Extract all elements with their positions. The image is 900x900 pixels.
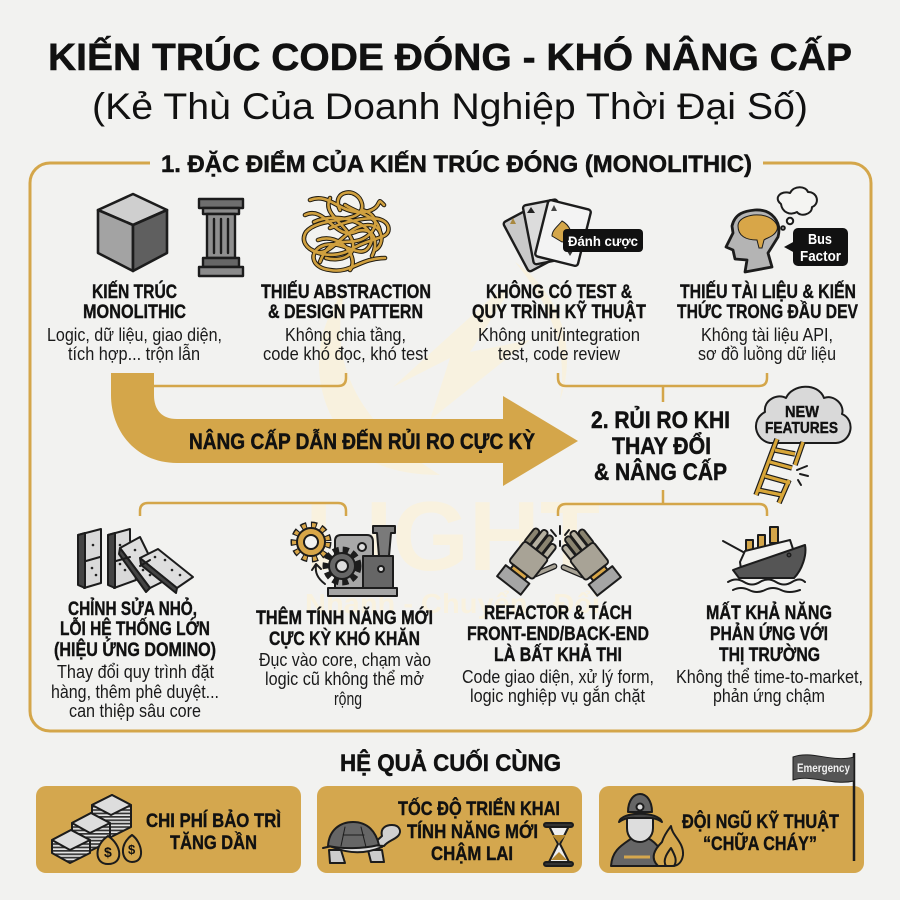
text block: Thiếu tài liệu: THIẾU TÀI LIỆU & KIẾN (680, 279, 856, 303)
watermark: Light logo: LIGHT (305, 481, 600, 591)
panel: main frame (30, 163, 871, 731)
text block: Refactor: FRONT-END/BACK-END (467, 623, 649, 645)
icon: firefighter and flame (611, 794, 683, 866)
panel: slow deployment: TỐC ĐỘ TRIỂN KHAI (398, 796, 560, 820)
icon: money stacks and bags: $ (104, 844, 112, 860)
panel: slow deployment: CHẬM LAI (431, 841, 513, 865)
icon: head with brain, thought cloud and Bus Factor (726, 187, 848, 272)
icon: hourglass (544, 823, 573, 866)
text block: Thiếu abstraction: code khó đọc, khó test (263, 343, 428, 364)
icon: money stacks and bags: $ (128, 842, 136, 857)
title (48, 35, 852, 127)
bracket: top right connector (558, 373, 767, 402)
icon: sinking ship (723, 527, 805, 592)
panel: firefighting team: ĐỘI NGŨ KỸ THUẬT (682, 809, 839, 833)
title: KIẾN TRÚC CODE ĐÓNG - KHÓ NÂNG CẤP (48, 35, 852, 79)
text block: Thiếu tài liệu (677, 279, 858, 364)
heading: section 2: & NÂNG CẤP (594, 458, 727, 486)
text block: Chỉnh sửa nhỏ: Thay đổi quy trình đặt (57, 661, 214, 682)
text block: Mất khả năng: phản ứng chậm (713, 685, 825, 706)
text block: Thiếu abstraction: THIẾU ABSTRACTION (261, 280, 431, 303)
text block: Thiếu tài liệu: sơ đồ luồng dữ liệu (698, 343, 836, 364)
text block: Refactor: LÀ BẤT KHẢ THI (494, 643, 622, 666)
text block: Thêm tính năng mới: rộng (334, 688, 362, 709)
heading: section 2: THAY ĐỔI (612, 432, 711, 460)
icon: playing cards with Đánh cược label (503, 199, 643, 272)
heading: section 2 (591, 405, 730, 486)
icon: column (199, 199, 243, 276)
text block: Không có test: Không unit/integration (478, 324, 640, 345)
text block: Kiến trúc Monolithic: tích hợp... trộn lẫn (68, 343, 200, 364)
heading: section 2: 2. RỦI RO KHI (591, 405, 730, 434)
text block: Chỉnh sửa nhỏ: can thiệp sâu core (69, 700, 201, 721)
text block: Kiến trúc Monolithic: MONOLITHIC (83, 301, 186, 323)
icon: new features cloud and broken ladder (756, 387, 851, 503)
watermark: Light logo (305, 262, 600, 619)
text block: Không có test: KHÔNG CÓ TEST & (486, 279, 632, 303)
arrow: upgrade leads to risk (111, 373, 578, 486)
bracket: lower right connector (558, 490, 767, 516)
icon: falling dominoes (78, 529, 193, 593)
icon: monolith cube (98, 194, 167, 271)
text block: Mất khả năng: THỊ TRƯỜNG (719, 642, 820, 666)
icon: robot hands separating (497, 524, 621, 601)
text block: Thêm tính năng mới: THÊM TÍNH NĂNG MỚI (256, 605, 433, 629)
text block: Thêm tính năng mới: CỰC KỲ KHÓ KHĂN (269, 626, 420, 650)
text block: Mất khả năng: MẤT KHẢ NĂNG (706, 601, 832, 624)
icon: tangled spaghetti (304, 193, 389, 271)
text block: Thiếu abstraction (261, 280, 431, 364)
text block: Refactor (462, 601, 654, 706)
text block: Kiến trúc Monolithic: KIẾN TRÚC (92, 279, 177, 303)
text block: Thiếu abstraction: Không chia tầng, (285, 324, 406, 345)
icon: money stacks and bags (52, 795, 141, 864)
text block: Chỉnh sửa nhỏ (51, 596, 219, 721)
text block: Refactor: REFACTOR & TÁCH (484, 601, 632, 624)
icon: new features cloud and broken ladder: NEW (785, 404, 820, 421)
icon: emergency flag (793, 753, 854, 861)
panel: firefighting team (599, 786, 864, 873)
icon: emergency flag: Emergency (797, 763, 851, 775)
text block: Không có test: test, code review (498, 343, 621, 364)
panel: maintenance cost: TĂNG DẦN (170, 831, 257, 854)
icon: head with brain, thought cloud and Bus Factor: Bus (808, 231, 832, 248)
text block: Thêm tính năng mới (256, 605, 433, 709)
text block: Mất khả năng: PHẢN ỨNG VỚI (710, 621, 828, 645)
panel: slow deployment (317, 786, 582, 873)
heading: section 1: 1. ĐẶC ĐIỂM CỦA KIẾN TRÚC ĐÓNG (MONOLITHIC) (161, 149, 752, 178)
panel: maintenance cost (36, 786, 301, 873)
arrow: upgrade leads to risk: NÂNG CẤP DẪN ĐẾN RỦI RO CỰC KỲ (189, 428, 535, 454)
text block: Thiếu abstraction: & DESIGN PATTERN (268, 301, 423, 323)
text block: Refactor: Code giao diện, xử lý form, (462, 666, 654, 687)
text block: Kiến trúc Monolithic (47, 279, 222, 364)
text block: Chỉnh sửa nhỏ: LỖI HỆ THỐNG LỚN (60, 616, 210, 640)
text block: Thêm tính năng mới: logic cũ không thể mở (265, 668, 424, 689)
text block: Thiếu tài liệu: Không tài liệu API, (701, 324, 833, 345)
text block: Chỉnh sửa nhỏ: CHỈNH SỬA NHỎ, (68, 596, 197, 620)
watermark: Light logo: Nhanh - Chuyển - Đổi (305, 588, 600, 619)
icon: new features cloud and broken ladder: FEATURES (765, 420, 838, 437)
text block: Kiến trúc Monolithic: Logic, dữ liệu, giao diện, (47, 324, 222, 345)
text block: Không có test (472, 279, 646, 364)
panel: maintenance cost: CHI PHÍ BẢO TRÌ (146, 809, 281, 832)
title: (Kẻ Thù Của Doanh Nghiệp Thời Đại Số) (92, 86, 808, 127)
text block: Chỉnh sửa nhỏ: (HIỆU ỨNG DOMINO) (54, 637, 216, 661)
panel: firefighting team: “CHỮA CHÁY” (703, 831, 817, 855)
text block: Refactor: logic nghiệp vụ gắn chặt (470, 685, 645, 706)
text block: Mất khả năng (676, 601, 863, 706)
panel: slow deployment: TÍNH NĂNG MỚI (407, 819, 538, 843)
text block: Mất khả năng: Không thể time-to-market, (676, 666, 863, 687)
heading: final consequences: HỆ QUẢ CUỐI CÙNG (340, 748, 561, 777)
text block: Chỉnh sửa nhỏ: hàng, thêm phê duyệt... (51, 681, 219, 702)
text block: Thêm tính năng mới: Đục vào core, chạm vào (259, 649, 431, 670)
icon: turtle (323, 822, 400, 863)
text block: Không có test: QUY TRÌNH KỸ THUẬT (472, 299, 646, 323)
bracket: top left connector (154, 373, 346, 386)
icon: head with brain, thought cloud and Bus Factor: Factor (800, 248, 841, 265)
text block: Thiếu tài liệu: THỨC TRONG ĐẦU DEV (677, 299, 858, 323)
icon: gears and machine (295, 526, 397, 596)
bracket: lower left connector (140, 503, 346, 516)
icon: playing cards with Đánh cược label: Đánh cược (568, 233, 638, 249)
